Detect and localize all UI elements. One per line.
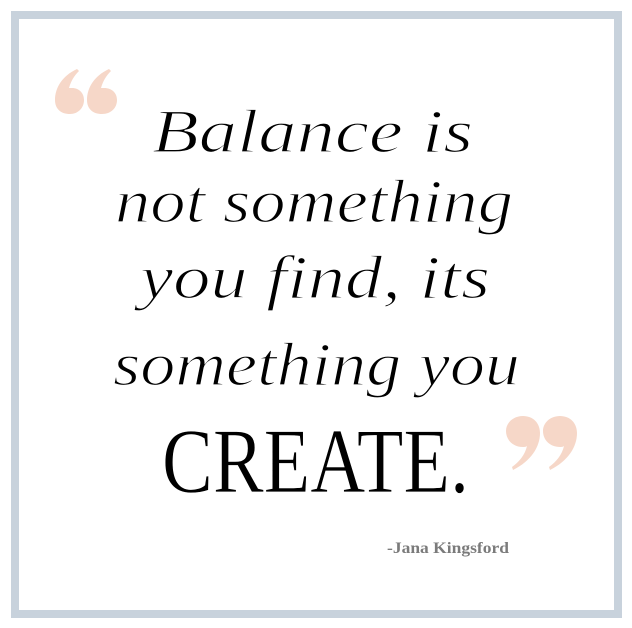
heading word: CREATE.: CREATE.	[162, 410, 469, 512]
line: something you: something you	[113, 332, 520, 399]
line: you find, its: you find, its	[133, 245, 490, 312]
quote text: script lines	[113, 99, 520, 399]
icon: closing quotation mark	[506, 416, 577, 470]
line: Balance is: Balance is	[152, 99, 473, 166]
attribution: -Jana Kingsford	[387, 540, 509, 557]
line: not something: not something	[115, 169, 513, 236]
icon: opening quotation mark	[55, 69, 117, 114]
